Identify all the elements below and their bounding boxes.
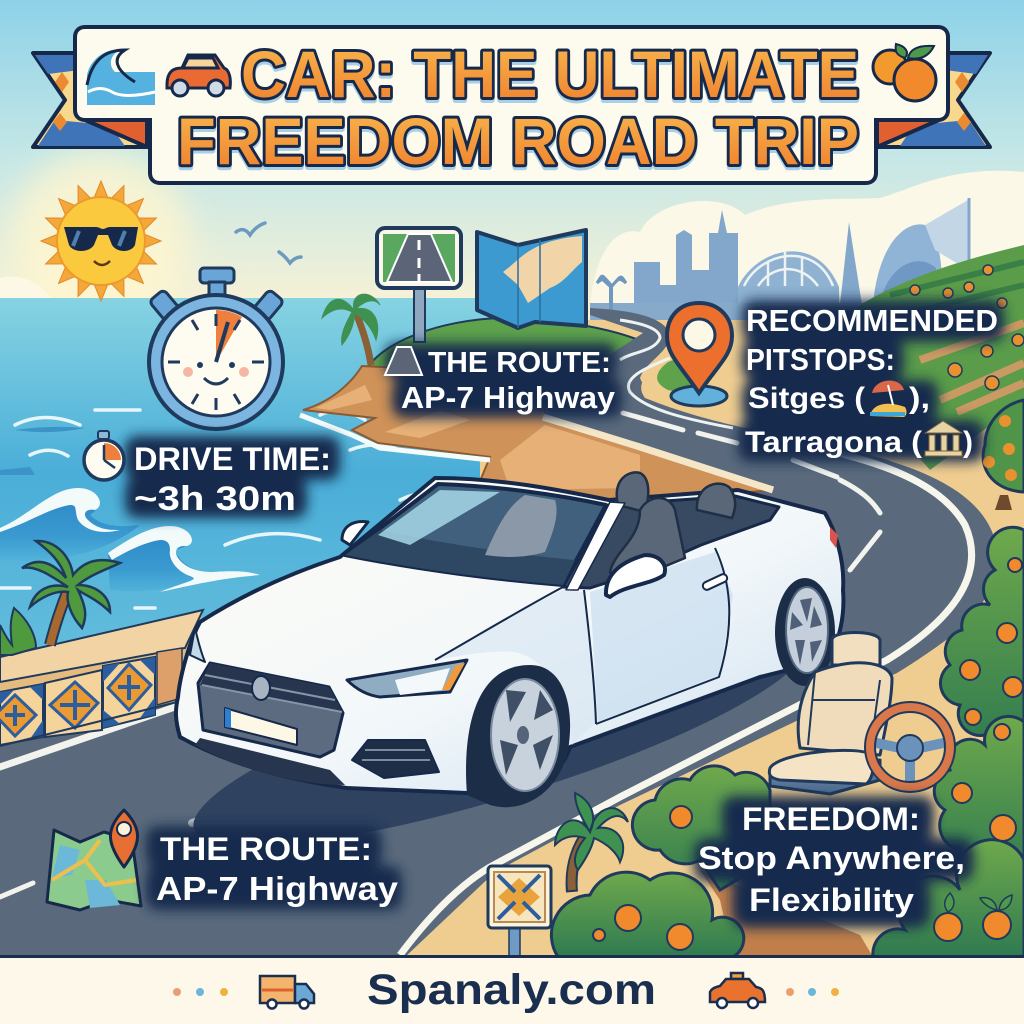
windshield	[345, 484, 606, 585]
wall end panel	[157, 648, 182, 705]
car body	[176, 478, 843, 794]
badge	[252, 676, 270, 700]
arch bridge lines	[744, 252, 833, 286]
road dashes	[0, 413, 880, 897]
label: freedom	[698, 801, 965, 918]
left headlight	[190, 628, 205, 662]
seats	[610, 472, 735, 585]
right orange tree	[983, 400, 1024, 510]
distant clouds behind skyline	[590, 171, 1024, 320]
headlight	[347, 660, 467, 697]
map icon lower	[47, 810, 141, 910]
tail light	[830, 527, 838, 548]
distant palm	[597, 276, 626, 311]
orange leaves	[945, 893, 1012, 912]
seat icon	[769, 632, 892, 794]
windshield reflection	[378, 490, 500, 545]
label: recommended pitstops: Tarragona (	[745, 426, 922, 459]
label: the route upper: AP-7 Highway	[401, 380, 616, 415]
vineyard rows	[880, 262, 1024, 412]
big wave two	[108, 528, 215, 591]
wall cap	[0, 610, 203, 682]
road outer white edge	[400, 442, 972, 955]
pin icon	[667, 303, 732, 406]
footer top line	[0, 955, 1024, 958]
label: recommended pitstops: )	[963, 426, 973, 459]
palm lower left	[0, 541, 120, 655]
sun glow	[10, 150, 190, 330]
icon: title wave	[87, 50, 155, 105]
road sign icon	[377, 228, 461, 342]
grille	[198, 663, 343, 757]
palm lower centre	[555, 793, 628, 892]
label: freedom: FREEDOM:	[742, 801, 920, 837]
title text	[177, 37, 859, 178]
label: recommended pitstops	[745, 303, 998, 459]
footer brand: Spanaly.com	[367, 966, 656, 1014]
folded map icon	[477, 230, 586, 328]
icon: small road	[385, 347, 422, 375]
hood arch shade	[435, 590, 596, 745]
icon: beach umbrella	[870, 381, 907, 417]
ripple shadows	[0, 427, 85, 475]
label: recommended pitstops: ),	[909, 382, 930, 415]
tile flowers	[0, 664, 151, 736]
label: the route upper	[385, 347, 616, 415]
road inner white edge lines	[620, 320, 733, 428]
rear wheel	[775, 578, 835, 686]
sky background	[0, 0, 1024, 320]
driver seat in windshield	[485, 495, 557, 557]
windshield frame white	[566, 502, 625, 590]
side mirror	[606, 555, 665, 597]
title banner panel	[75, 27, 948, 183]
cliff highlights	[315, 385, 640, 490]
door panel shade	[590, 552, 733, 722]
icon: title car	[167, 55, 230, 96]
fog lamp	[352, 740, 439, 778]
cliff foam	[300, 415, 490, 460]
footer van icon	[260, 976, 314, 1008]
lower bumper	[195, 738, 345, 785]
green hill	[360, 318, 650, 385]
icon: title oranges	[873, 44, 936, 101]
label: freedom: Flexibility	[749, 882, 914, 918]
car shadow	[176, 582, 824, 888]
label: recommended pitstops: RECOMMENDED	[746, 303, 998, 338]
text halos	[125, 300, 1004, 928]
sun	[41, 181, 161, 301]
tree oranges	[593, 558, 1023, 950]
footer dots right	[786, 988, 839, 996]
birds	[236, 223, 301, 263]
label: the route lower	[156, 831, 399, 907]
fog lamp slats	[362, 750, 430, 760]
bush bottom	[551, 872, 744, 957]
dashboard band	[345, 530, 575, 585]
wave two crest	[108, 526, 260, 592]
tile corner ornaments	[0, 657, 155, 739]
bush right lower	[934, 716, 1024, 880]
bush bottom right	[873, 840, 1024, 957]
brown cliff	[303, 366, 773, 505]
crescent grass	[657, 350, 700, 395]
label: drive time	[84, 431, 331, 518]
steering wheel icon	[870, 707, 950, 787]
front wheel	[466, 665, 570, 807]
label: the route lower: THE ROUTE:	[160, 831, 372, 867]
icon: small stopwatch	[84, 431, 124, 480]
right ribbon	[877, 53, 990, 147]
title banner ribbons	[33, 53, 990, 147]
label: recommended pitstops: Sitges (	[748, 382, 865, 415]
footer band	[0, 957, 1024, 1024]
left mirror	[342, 522, 368, 545]
skyline	[590, 198, 969, 323]
label: the route upper: THE ROUTE:	[428, 347, 611, 379]
palm near cliff	[322, 294, 380, 365]
road curb	[543, 417, 773, 490]
title text: CAR: THE ULTIMATE	[241, 37, 859, 111]
bush centre	[632, 766, 770, 890]
grille slats	[200, 663, 343, 713]
bush right middle	[940, 527, 1024, 753]
road	[0, 308, 996, 957]
label: recommended pitstops: PITSTOPS:	[746, 342, 895, 377]
label: the route lower: AP-7 Highway	[156, 870, 399, 907]
sea ripples	[0, 410, 460, 608]
vineyard hill	[820, 245, 1024, 470]
wave one crest	[0, 488, 120, 532]
car	[176, 472, 843, 807]
footer dots left	[173, 988, 228, 996]
label: freedom: Stop Anywhere,	[698, 840, 965, 876]
tiled wall	[0, 610, 203, 746]
footer taxi icon	[710, 973, 765, 1008]
sand crescent by pin	[641, 340, 770, 428]
sea	[0, 298, 500, 648]
wall tiles	[0, 657, 155, 745]
sand base	[390, 320, 1024, 960]
stopwatch	[149, 268, 284, 429]
tile road sign	[488, 866, 551, 957]
left ribbon	[33, 53, 147, 147]
vineyard oranges	[910, 265, 1024, 390]
rear deck dark cockpit	[563, 496, 779, 588]
door shutlines	[435, 548, 729, 724]
door handle	[702, 573, 728, 591]
left cloud	[0, 277, 52, 300]
label: drive time: DRIVE TIME:	[134, 441, 331, 477]
label: drive time: ~3h 30m	[134, 480, 296, 518]
icon: temple	[925, 421, 962, 456]
number plate	[225, 708, 297, 745]
brown earth patch	[700, 870, 873, 957]
title text: FREEDOM ROAD TRIP	[177, 104, 859, 178]
big wave one	[0, 490, 140, 561]
orange bushes	[551, 527, 1024, 957]
